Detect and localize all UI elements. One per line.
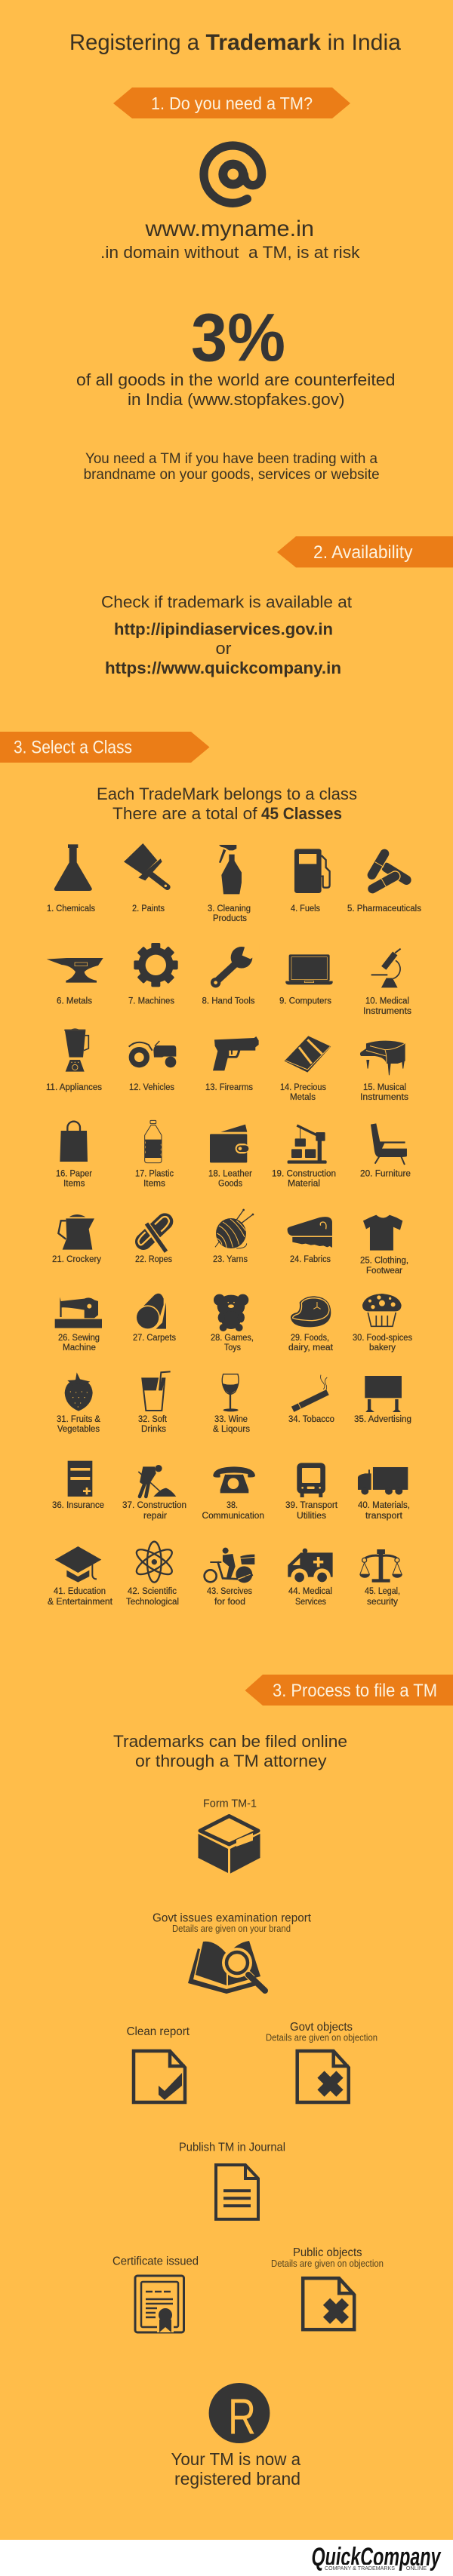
label: [353, 1334, 412, 1352]
step label: Clean report: Clean report: [127, 2025, 190, 2038]
class 25 clothing: [360, 1215, 408, 1276]
label: [288, 1587, 332, 1607]
section ribbon: 2. Availability: 2. Availability: [313, 542, 412, 563]
label: 11. Appliances: [46, 1083, 102, 1092]
icon: t-shirt: [363, 1215, 402, 1251]
section ribbon: 2. Availability: [277, 536, 453, 567]
class 44 medical services: [288, 1549, 333, 1607]
label: 44. Medical: [288, 1587, 332, 1596]
icon: yarn ball: [215, 1209, 254, 1248]
class 28 games toys: [211, 1294, 254, 1352]
icon: metal bars: [285, 1036, 331, 1073]
label: [272, 1169, 336, 1189]
label: [208, 1169, 252, 1189]
label: Instruments: [363, 1007, 411, 1016]
statistic description: [76, 370, 396, 409]
section ribbon: 3. Select a Class: 3. Select a Class: [14, 738, 132, 757]
step text: Public objects: Details are given on objection: [271, 2258, 384, 2269]
label: 32. Soft: [138, 1415, 168, 1424]
section ribbon: 1. Do you need a TM?: 1. Do you need a TM?: [151, 94, 313, 113]
icon: paper bag: [60, 1122, 88, 1162]
label: 3. Cleaning: [208, 904, 251, 913]
class 29 foods: [288, 1296, 334, 1352]
icon: pistol: [213, 1036, 259, 1070]
icon: kettle: [58, 1214, 94, 1250]
label: 5. Pharmaceuticals: [347, 904, 421, 913]
icon: certificate: [135, 2276, 184, 2332]
class 38 communication: [202, 1466, 264, 1521]
class 2 paints: [124, 843, 168, 913]
label: dairy, meat: [288, 1343, 334, 1352]
label: 30. Food-spices: [353, 1334, 412, 1343]
icon: strawberry: [65, 1372, 93, 1411]
icon: grand piano: [360, 1041, 405, 1075]
step text: examination report: Details are given on your brand: [172, 1924, 291, 1934]
title: [69, 30, 401, 55]
step label: Certificate issued: Certificate issued: [112, 2255, 199, 2267]
label: 7. Machines: [128, 997, 174, 1006]
label: 17. Plastic: [135, 1169, 174, 1178]
label: Products: [213, 914, 247, 923]
class 15 musical instruments: [360, 1041, 408, 1102]
icon: muffin: [362, 1294, 402, 1326]
class 31 fruits vegetables: [57, 1372, 100, 1434]
icon: blender: [64, 1028, 88, 1072]
class 36 insurance: [52, 1461, 104, 1510]
label: 29. Foods,: [291, 1334, 329, 1343]
icon: steak: [291, 1296, 331, 1327]
icon: billboard: [365, 1376, 402, 1412]
icon: wallet: [210, 1125, 248, 1162]
label: [285, 1501, 338, 1521]
class 17 plastic items: [135, 1120, 174, 1189]
label: [207, 1587, 252, 1607]
step text: Govt objects: Govt objects: [290, 2021, 353, 2034]
label: [211, 1334, 254, 1352]
class 20 furniture: [360, 1123, 411, 1178]
label: [138, 1415, 168, 1434]
class 5 pharmaceuticals: [347, 854, 421, 913]
label: 16. Paper: [56, 1169, 92, 1178]
domain text: www.myname.in: [144, 216, 314, 241]
logo: QuickCompany: ONLINE: [406, 2565, 427, 2571]
label: 18. Leather: [208, 1169, 252, 1178]
step label: Publish TM in Journal: Publish TM in Journal: [179, 2142, 285, 2154]
icon: carpet roll: [135, 1294, 166, 1330]
class 40 materials transport: [358, 1467, 410, 1521]
label: 10. Medical: [365, 997, 409, 1006]
icon: spray bottle: [219, 845, 242, 894]
label: 36. Insurance: [52, 1501, 104, 1510]
label: 23. Yarns: [213, 1255, 248, 1264]
class 26 sewing machine: [55, 1297, 102, 1352]
label: 39. Transport: [285, 1501, 338, 1510]
label: 24. Fabrics: [290, 1255, 331, 1264]
label: Services: [295, 1598, 326, 1607]
label: & Entertainment: [48, 1598, 113, 1607]
statistic description: of all goods in the world are counterfeited: [76, 370, 396, 389]
label: Footwear: [366, 1267, 402, 1276]
label: Toys: [224, 1343, 241, 1352]
icon: tractor: [129, 1041, 176, 1067]
class 27 carpets: [133, 1294, 176, 1343]
closing text: registered brand: [174, 2469, 300, 2488]
label: Instruments: [360, 1093, 408, 1102]
class 3 cleaning products: [208, 845, 251, 923]
class 11 appliances: [46, 1028, 102, 1092]
class 39 transport utilities: [285, 1463, 338, 1521]
class 12 vehicles: [129, 1041, 176, 1092]
icon: plastic bottle: [145, 1120, 162, 1163]
label: 31. Fruits &: [57, 1415, 100, 1424]
label: 2. Paints: [132, 904, 165, 913]
label: 4. Fuels: [291, 904, 320, 913]
step text: Public objects: Public objects: [293, 2246, 362, 2259]
icon: ambulance: [288, 1549, 333, 1582]
domain text: [100, 216, 361, 262]
section ribbon: 3. Process to file a TM: 3. Process to file a TM: [273, 1681, 437, 1701]
process intro text: or through a TM attorney: [135, 1752, 326, 1770]
label: Items: [143, 1180, 165, 1189]
icon: laptop: [285, 954, 333, 984]
label: Utilities: [297, 1512, 326, 1521]
label: 9. Computers: [279, 997, 331, 1006]
label: [122, 1501, 186, 1521]
label: 42. Scientific: [128, 1587, 177, 1596]
label: 34. Tobacco: [288, 1415, 334, 1424]
label: 19. Construction: [272, 1169, 336, 1178]
class 33 wine liquors: [213, 1374, 250, 1434]
step text: Govt objects: [266, 2021, 378, 2043]
need a TM text: You need a TM if you have been trading with a: [85, 451, 378, 467]
label: for food: [214, 1598, 245, 1607]
classes intro text: Each TradeMark belongs to a class: [97, 784, 357, 803]
class 8 hand tools: [202, 944, 259, 1006]
label: bakery: [369, 1343, 396, 1352]
process intro text: Trademarks can be filed online: [113, 1732, 347, 1751]
class 30 food spices bakery: [353, 1294, 412, 1352]
label: [363, 997, 411, 1016]
step text: examination report: [153, 1912, 312, 1934]
label: [56, 1169, 92, 1189]
label: [135, 1169, 174, 1189]
icon: teddy bear: [214, 1294, 248, 1331]
icon: document with check: [134, 2051, 185, 2102]
class 45 legal security: [359, 1549, 402, 1607]
icon: crane and crates: [288, 1125, 327, 1164]
class 22 ropes: [135, 1217, 172, 1264]
label: Goods: [218, 1180, 242, 1189]
title: Trademark: [205, 30, 321, 55]
class 32 soft drinks: [138, 1371, 171, 1434]
label: [358, 1501, 410, 1521]
class 18 leather goods: [208, 1125, 252, 1189]
icon: insurance document: [68, 1461, 92, 1497]
class 10 medical instruments: [363, 949, 411, 1016]
statistic: 3%: 3%: [191, 300, 285, 376]
class 19 construction material: [272, 1125, 336, 1189]
need a TM text: [84, 451, 380, 483]
label: 22. Ropes: [135, 1255, 172, 1264]
class 13 firearms: [205, 1036, 259, 1092]
icon: sewing machine: [55, 1297, 102, 1328]
icon: cigarette: [293, 1375, 328, 1410]
label: 41. Education: [54, 1587, 106, 1596]
availability text: [101, 593, 352, 677]
label: 15. Musical: [363, 1083, 406, 1092]
title: in India: [328, 30, 401, 55]
process intro text: [113, 1732, 347, 1770]
classes intro text: 45 Classes: [261, 804, 342, 823]
label: Drinks: [141, 1425, 166, 1434]
label: Machine: [63, 1343, 96, 1352]
label: [213, 1415, 250, 1434]
label: 14. Precious: [280, 1083, 326, 1092]
icon: public objection document: [303, 2278, 354, 2329]
label: 40. Materials,: [358, 1501, 410, 1510]
icon: document with cross: [297, 2051, 349, 2102]
logo: QuickCompany: COMPANY & TRADEMARKS: [325, 2565, 395, 2571]
title: Registering a: [69, 30, 199, 55]
availability text: https://www.quickcompany.in: [105, 659, 341, 677]
label: [288, 1334, 334, 1352]
label: 26. Sewing: [58, 1334, 100, 1343]
label: 38.: [226, 1501, 238, 1510]
label: 28. Games,: [211, 1334, 254, 1343]
icon: wine glass: [222, 1374, 239, 1411]
icon: drink glass: [142, 1371, 171, 1411]
label: [58, 1334, 100, 1352]
step text: examination report: Govt issues examination report: [153, 1912, 312, 1925]
label: Communication: [202, 1512, 264, 1521]
icon: fabric roll: [288, 1217, 332, 1248]
icon: flask: [54, 844, 92, 891]
class 7 machines: [128, 943, 178, 1006]
label: 37. Construction: [122, 1501, 186, 1510]
icon: truck: [358, 1467, 408, 1495]
icon: journal page: [216, 2165, 258, 2219]
label: 43. Sercives: [207, 1587, 252, 1596]
class 41 education: [48, 1546, 113, 1607]
statistic description: in India (www.stopfakes.gov): [128, 390, 344, 409]
class 37 construction repair: [122, 1465, 186, 1521]
section ribbon: 3. Select a Class: [0, 732, 210, 763]
icon: fuel pump: [294, 849, 330, 893]
label: 20. Furniture: [360, 1169, 411, 1178]
class 14 precious metals: [280, 1036, 331, 1102]
icon: rotary telephone: [213, 1466, 255, 1493]
icon: book and magnifier: [188, 1941, 265, 1994]
icon: wrench: [211, 944, 259, 987]
class 24 fabrics: [288, 1217, 332, 1264]
need a TM text: brandname on your goods, services or website: [84, 467, 380, 483]
class 35 advertising: [354, 1376, 411, 1424]
icon: coiled rope: [138, 1217, 169, 1251]
class 42 scientific: [126, 1542, 179, 1607]
classes intro text: There are a total of: [112, 804, 258, 823]
label: [208, 904, 251, 923]
icon: microscope: [371, 949, 401, 987]
class 16 paper items: [56, 1122, 92, 1189]
label: [57, 1415, 100, 1434]
icon: capsules: [372, 854, 406, 889]
label: [365, 1587, 400, 1607]
icon: graduation cap: [55, 1546, 101, 1583]
label: 12. Vehicles: [129, 1083, 174, 1092]
class 21 crockery: [52, 1214, 101, 1264]
label: transport: [365, 1512, 403, 1521]
step text: Govt objects: Details are given on objection: [266, 2033, 378, 2043]
label: Vegetables: [57, 1425, 100, 1434]
icon: scales of justice: [359, 1549, 402, 1583]
label: 8. Hand Tools: [202, 997, 255, 1006]
icon: at sign: [204, 146, 262, 203]
icon: delivery scooter: [205, 1548, 254, 1583]
label: 45. Legal,: [365, 1587, 400, 1596]
section ribbon: 1. Do you need a TM?: [113, 88, 350, 118]
label: [202, 1501, 264, 1521]
class 1 chemicals: [47, 844, 95, 913]
closing text: [171, 2449, 300, 2488]
availability text: Check if trademark is available at: [101, 593, 352, 612]
label: 25. Clothing,: [360, 1257, 408, 1266]
label: 27. Carpets: [133, 1334, 176, 1343]
step label: Form TM-1: Form TM-1: [203, 1798, 257, 1810]
label: & Liqours: [213, 1425, 250, 1434]
icon: road worker: [138, 1465, 176, 1497]
label: 6. Metals: [57, 997, 92, 1006]
label: 33. Wine: [214, 1415, 248, 1424]
icon: registered mark: R: [228, 2389, 256, 2446]
icon: anvil: [47, 958, 103, 983]
section ribbon: 3. Process to file a TM: [245, 1675, 453, 1706]
class 9 computers: [279, 954, 333, 1006]
icon: gear: [134, 943, 178, 987]
label: [360, 1083, 408, 1102]
label: security: [367, 1598, 398, 1607]
label: Technological: [126, 1598, 179, 1607]
label: Metals: [290, 1093, 316, 1102]
icon: paint brush: [124, 843, 168, 887]
icon: armchair: [371, 1123, 407, 1165]
icon: atom: [133, 1542, 175, 1583]
class 6 metals: [47, 958, 103, 1006]
icon: registered mark: [209, 2383, 270, 2446]
label: [280, 1083, 326, 1102]
availability text: http://ipindiaservices.gov.in: [114, 620, 333, 639]
step text: Public objects: [271, 2246, 384, 2269]
class 43 services for food: [205, 1548, 254, 1607]
class 4 fuels: [291, 849, 330, 913]
class 34 tobacco: [288, 1375, 334, 1424]
class 23 yarns: [213, 1209, 254, 1264]
availability text: or: [216, 639, 231, 658]
label: [126, 1587, 179, 1607]
icon: bus: [297, 1463, 325, 1497]
closing text: Your TM is now a: [171, 2449, 300, 2469]
label: 1. Chemicals: [47, 904, 95, 913]
label: 35. Advertising: [354, 1415, 411, 1424]
label: Items: [63, 1180, 85, 1189]
label: 21. Crockery: [52, 1255, 101, 1264]
label: [360, 1257, 408, 1276]
icon: box: [198, 1816, 260, 1874]
domain text: .in domain without a TM, is at risk: [100, 243, 361, 262]
label: 13. Firearms: [205, 1083, 253, 1092]
label: Material: [288, 1180, 320, 1189]
classes intro text: [97, 784, 357, 823]
label: repair: [143, 1512, 167, 1521]
label: [48, 1587, 113, 1607]
